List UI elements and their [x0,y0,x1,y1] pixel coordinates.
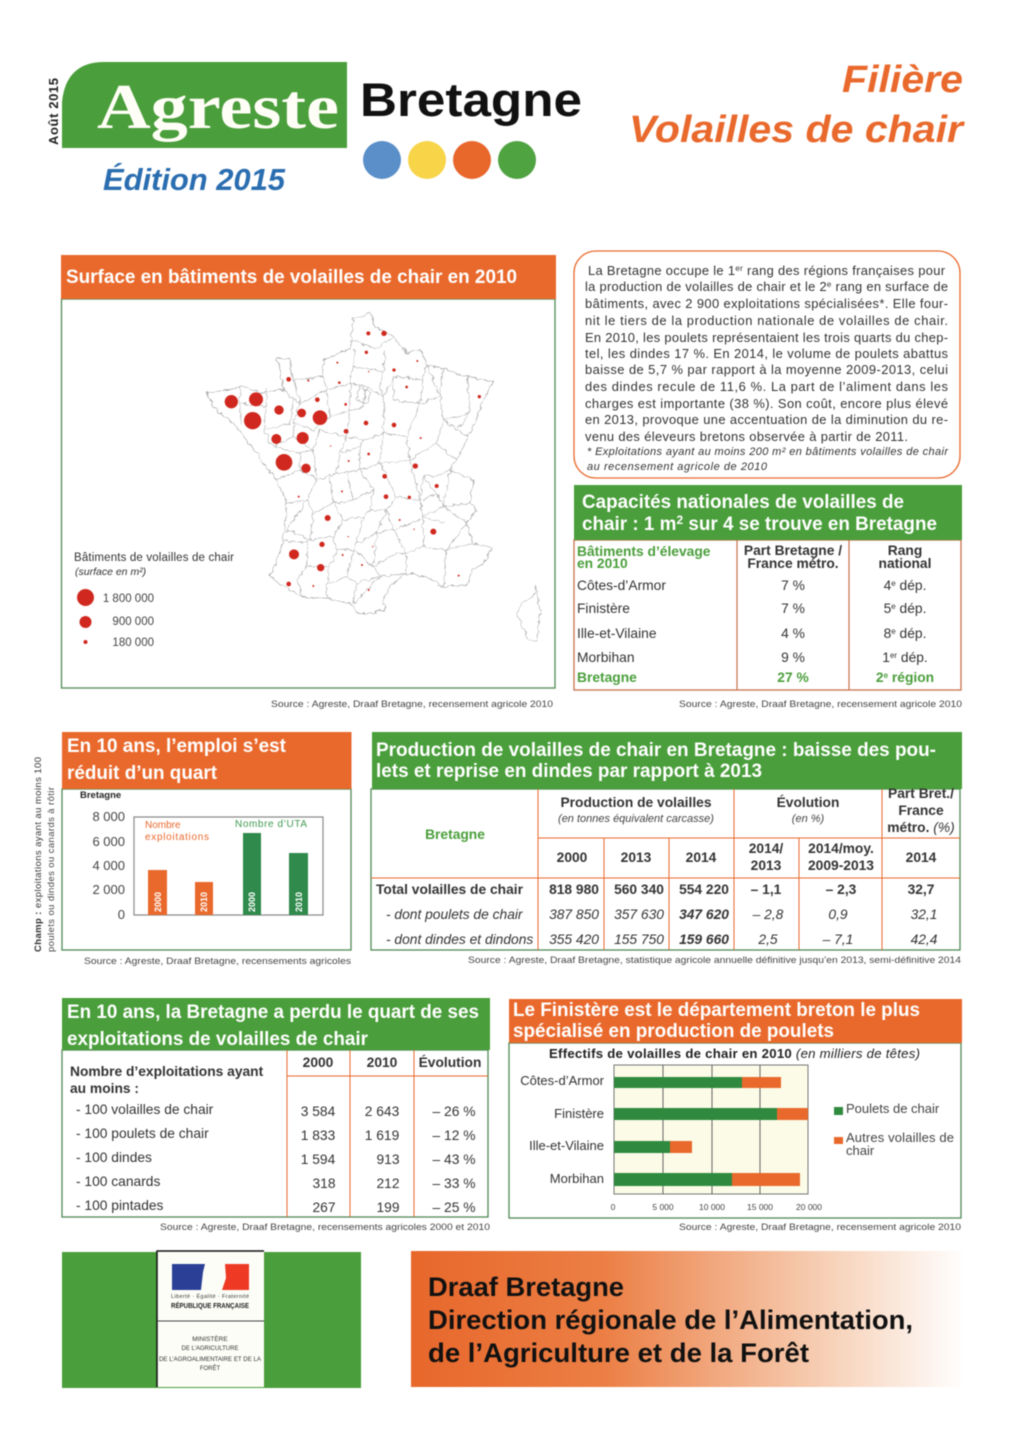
footer: Draaf Bretagne: Draaf Bretagne [428,1272,624,1302]
table: 4 [884,578,891,593]
text block: introduction: e [827,280,832,289]
table: production: 560 340 [614,882,664,897]
table: Finistère [577,601,630,616]
four coloured dots [363,141,536,179]
chart legend [834,1101,954,1158]
bar chart: employment: Bretagne [80,790,121,801]
table: région [888,670,934,685]
heading [372,732,962,789]
bar chart: employment: 2010 [199,892,209,912]
text block: introduction: des dindes recule de 11,6 %. La part de l’aliment dans les [585,379,948,394]
side note: scope: Champ : exploitations ayant au moins 100 [33,757,44,952]
title: Volailles de chair [629,109,965,151]
footer: ministry logo band: RÉPUBLIQUE FRANÇAISE [171,1301,249,1310]
footer: Draaf Bretagne: de l’Agriculture et de la Forêt [428,1338,809,1368]
heading: Capacités nationales de volailles de [582,492,904,513]
table: farms: 318 [312,1176,336,1191]
table: production [376,786,955,947]
stacked bar chart: 15 000 [747,1202,773,1212]
table: farms: – 33 % [433,1176,475,1191]
table: farms: - 100 poulets de chair [76,1126,209,1141]
table: production: Production de volailles [560,795,712,810]
logo: Agreste [62,62,347,148]
table: production: – 1,1 [751,882,782,897]
bar chart: employment: Nombre [145,820,181,831]
heading: exploitations de volailles de chair [67,1029,369,1050]
heading [62,998,490,1050]
table: farms: – 25 % [433,1200,475,1215]
table: production: 2009-2013 [808,858,874,873]
text block: introduction [574,251,960,478]
table: production: (en tonnes équivalent carcasse) [558,813,714,825]
table: Morbihan [577,650,635,665]
table: dép. [897,650,928,665]
heading: lets et reprise en dindes par rapport à 2013 [376,761,762,782]
table: production: 155 750 [614,932,664,947]
edition: Édition 2015 [103,162,286,197]
table: farms: 2000 [303,1055,334,1070]
bar chart: employment: 2 000 [92,882,125,897]
table: farms: 1 594 [301,1152,336,1167]
table: farms: 2 643 [365,1104,400,1119]
bar chart: employment: 0 [118,907,125,922]
text block: introduction: tel, les dindes 17 %. En 2014, le volume de poulets abattus [585,346,948,361]
table: production: 2014 [686,850,717,865]
table: farms: - 100 pintades [76,1198,164,1213]
heading: En 10 ans, l’emploi s’est [67,736,287,757]
source: production: Source : Agreste, Draaf Bretagne, statistique agricole annuelle définitive jusqu’en 2013, semi-définitive 2014 [468,955,961,966]
heading: spécialisé en production de poulets [513,1021,834,1042]
text block: introduction: * Exploitations ayant au moins 200 m² en bâtiments volailles de chair [587,446,949,458]
text block: introduction: charges est importante (38 %). Son coût, encore plus élevé [585,396,948,411]
table: farms: - 100 canards [76,1174,160,1189]
map legend: 900 000 [112,616,154,628]
table [577,543,934,685]
table: production: 2014/moy. [808,841,874,856]
table: farms: Nombre d’exploitations ayant [70,1064,264,1079]
bar chart: employment: Nombre d’UTA [235,819,307,830]
heading: 2 [676,513,683,527]
stacked bar chart [520,1065,822,1212]
table: farms: 1 833 [301,1128,336,1143]
panel: national capacities [574,485,962,690]
panel: Finistère [509,999,962,1218]
table: farms: – 26 % [433,1104,475,1119]
chart title: Effectifs de volailles de chair en 2010 (en milliers de têtes) [549,1046,920,1061]
icon: French Republic flag [172,1264,249,1290]
heading: Production de volailles de chair en Bretagne : baisse des pou- [376,740,936,761]
chart legend: Poulets de chair [846,1101,940,1116]
table: 27 % [777,670,809,685]
table: production: 554 220 [679,882,729,897]
stacked bar chart: Finistère [554,1106,604,1121]
table: production: 2013 [751,858,782,873]
title [629,59,965,151]
table: farms: - 100 volailles de chair [76,1102,214,1117]
table: Bretagne [577,670,637,685]
table: production: 2014 [906,850,937,865]
footer: Draaf Bretagne [411,1251,965,1387]
text block: introduction: En 2010, les poulets représentaient les trois quarts du chep- [585,330,948,345]
table: production: 32,1 [911,907,937,922]
map of France [207,313,540,642]
table: production: métro. (%) [887,820,955,835]
footer: ministry logo band: FORÊT [200,1364,220,1372]
table: production: 2013 [621,850,652,865]
table: 5 [884,601,891,616]
table: Côtes-d’Armor [577,578,666,593]
footer: ministry logo band [62,1251,361,1388]
panel: map [61,255,556,688]
source: Finistère: Source : Agreste, Draaf Bretagne, recensement agricole 2010 [679,1222,961,1233]
table: production: Bretagne [425,827,485,842]
table: e [891,602,896,611]
table: farms: - 100 dindes [76,1150,152,1165]
panel: employment [62,732,352,950]
bar chart: employment [80,790,323,922]
text block: introduction: er [735,264,743,273]
chart legend: Autres volailles de [846,1130,954,1145]
table: er [890,651,897,660]
text block: introduction: nit le tiers de la production nationale de volailles de chair. [585,313,948,328]
table: production: Total volailles de chair [376,882,524,897]
table: farms: – 12 % [433,1128,475,1143]
table: farms: 212 [376,1176,400,1191]
table: e [884,671,889,680]
table: production: 387 850 [549,907,599,922]
bar chart: employment: 6 000 [92,834,125,849]
stacked bar chart: 10 000 [699,1202,725,1212]
heading: En 10 ans, la Bretagne a perdu le quart de ses [67,1002,479,1023]
logo: Agreste: Agreste [97,72,339,142]
table: 8 [884,626,891,641]
source: farms: Source : Agreste, Draaf Bretagne, recensements agricoles 2000 et 2010 [160,1222,490,1233]
heading: réduit d’un quart [67,763,218,784]
heading [509,999,962,1043]
table: farms: 199 [376,1200,400,1215]
table: production: – 2,3 [826,882,857,897]
map legend [74,552,234,649]
table: Rang [888,543,922,558]
table: production: 818 980 [549,882,599,897]
table: production: - dont poulets de chair [386,907,524,922]
footer: ministry logo band: DE L’AGRICULTURE [182,1346,238,1352]
heading [574,485,962,540]
stacked bar chart: Morbihan [550,1171,604,1186]
table: farms: 2010 [367,1055,398,1070]
text block: introduction: venu des éleveurs bretons observée à partir de 2011. [585,429,908,444]
table: farms: 1 619 [365,1128,400,1143]
table: production: 2000 [557,850,588,865]
table: production: – 2,8 [752,907,784,922]
bar chart: employment: 2000 [153,892,163,912]
text block: introduction: La Bretagne occupe le 1 [588,263,735,278]
table: France métro. [747,556,839,571]
heading: chair : 1 m [582,514,677,535]
map legend: 1 800 000 [103,593,154,605]
heading [62,732,352,789]
heading: Le Finistère est le département breton le plus [513,1000,920,1021]
bar chart: employment: exploitations [145,832,209,843]
table: farms: 267 [312,1200,336,1215]
table: 1 [882,650,890,665]
table: farms: 913 [376,1152,400,1167]
table: farms: 3 584 [301,1104,336,1119]
text block: introduction: rang en surface de [832,279,948,294]
table: farms: au moins : [70,1081,139,1096]
table: dép. [896,626,926,641]
table: en 2010 [577,556,628,571]
footer: ministry logo band: MINISTÈRE [192,1334,228,1343]
table: dép. [896,601,926,616]
footer: ministry logo band: Liberté · Égalité · Fraternité [171,1293,249,1300]
table: production: - dont dindes et dindons [386,932,533,947]
table: production: 2,5 [757,932,778,947]
table: production: France [898,803,944,818]
table: 7 % [781,601,805,616]
chart legend: chair [846,1143,875,1158]
table: production: (en %) [792,813,825,825]
heading: sur 4 se trouve en Bretagne [683,514,937,535]
table: e [891,627,896,636]
table: production: 357 630 [614,907,664,922]
table: Bâtiments d’élevage [577,544,711,559]
table: Ille-et-Vilaine [577,626,657,641]
bar chart: employment: 8 000 [92,809,125,824]
stacked bar chart: Côtes-d’Armor [520,1073,605,1088]
footer: Draaf Bretagne: Direction régionale de l’Alimentation, [428,1305,913,1335]
table: e [891,579,896,588]
table: production: 32,7 [908,882,935,897]
table: farms: – 43 % [433,1152,475,1167]
table: dép. [896,578,926,593]
map legend: 180 000 [112,637,154,649]
side note: scope: poulets ou dindes ou canards à rôtir [46,787,57,952]
side note: scope [33,757,57,952]
table: farms [70,1054,481,1215]
text block: introduction: au recensement agricole de 2010 [587,461,768,473]
source: employment: Source : Agreste, Draaf Bretagne, recensements agricoles [84,956,351,967]
stacked bar chart: Ille-et-Vilaine [529,1138,604,1153]
bar chart: employment: 4 000 [92,858,125,873]
table: Part Bretagne / [744,543,842,558]
footer: ministry logo band: DE L’AGROALIMENTAIRE ET DE LA [159,1357,261,1363]
bar chart: employment: 2000 [247,892,257,912]
region name: Bretagne [360,73,582,126]
table: 2 [876,670,884,685]
table: national [879,556,931,571]
text block: introduction: en 2013, provoque une accentuation de la diminution du re- [585,412,948,427]
text block: introduction: la production de volailles de chair et le 2 [585,279,827,294]
table: production: 2014/ [749,841,783,856]
table: production: – 7,1 [822,932,853,947]
map legend: (surface en m²) [75,566,146,578]
table: farms: Évolution [419,1054,481,1070]
table: production: 0,9 [828,907,848,922]
table: production: 347 620 [679,907,729,922]
date label: Août 2015 [46,78,61,145]
map heading [61,255,556,299]
source: capacities: Source : Agreste, Draaf Bretagne, recensement agricole 2010 [679,699,962,710]
text block: introduction: bâtiments, avec 2 900 exploitations spécialisées*. Elle four- [585,296,948,311]
map legend: Bâtiments de volailles de chair [74,552,234,564]
map heading: Surface en bâtiments de volailles de chair en 2010 [66,267,517,288]
stacked bar chart: 0 [611,1202,616,1212]
panel: farms [62,998,490,1217]
bar chart: employment: 2010 [294,892,304,912]
stacked bar chart: 20 000 [796,1202,822,1212]
table: 9 % [781,650,805,665]
table: production: 42,4 [911,932,938,947]
title: Filière [842,59,963,101]
panel: production [371,732,962,950]
text block: introduction: baisse de 5,7 % par rapport à la moyenne 2009-2013, celui [585,362,948,377]
table: production: 159 660 [679,932,729,947]
table: production: 355 420 [549,932,599,947]
source: map: Source : Agreste, Draaf Bretagne, recensement agricole 2010 [271,699,553,710]
table: 4 % [781,626,805,641]
stacked bar chart: 5 000 [652,1202,674,1212]
table: production: Part Bret./ [888,786,954,801]
table: 7 % [781,578,805,593]
text block: introduction: rang des régions françaises pour [743,263,946,278]
table: production: Évolution [777,794,839,810]
